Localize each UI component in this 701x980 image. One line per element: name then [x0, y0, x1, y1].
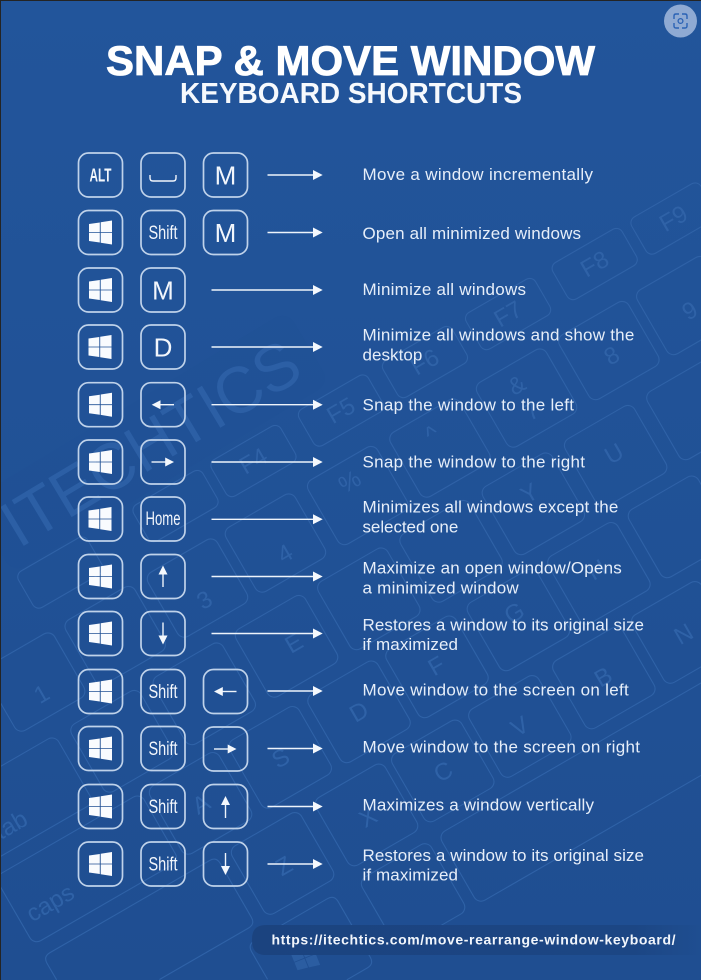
- title: SNAP & MOVE WINDOW: [106, 37, 595, 84]
- watermark: keyboard outline: G: [500, 597, 529, 630]
- row 3: Win M: Minimize all windows: [362, 280, 526, 299]
- row 9: Win Down: [78, 612, 644, 656]
- watermark: keyboard outline: E: [281, 628, 308, 659]
- row 4: Win D: D: [154, 332, 172, 362]
- watermark: keyboard outline: H: [583, 554, 611, 586]
- row 1: Alt Space M: [78, 153, 594, 197]
- row 3: Win M: [78, 268, 526, 312]
- row 1: Alt Space M: M: [215, 160, 236, 190]
- watermark: keyboard outline: Z: [271, 851, 297, 882]
- watermark: keyboard outline: C: [429, 756, 458, 788]
- watermark: keyboard outline: V: [506, 711, 534, 743]
- watermark: keyboard outline: F7: [489, 296, 527, 333]
- row 3: Win M: M: [152, 276, 174, 306]
- row 6: Win Right: [78, 440, 585, 484]
- row 8: Win Up: [78, 554, 622, 598]
- watermark: keyboard outline: Y: [516, 478, 544, 509]
- watermark: keyboard outline: F4: [235, 443, 273, 480]
- watermark: keyboard outline: F5: [322, 392, 360, 430]
- row 5: Win Left: [78, 383, 574, 427]
- watermark: keyboard outline: 3: [192, 586, 217, 616]
- capture button: [664, 4, 697, 38]
- watermark: keyboard outline: 7: [520, 397, 545, 427]
- row 11: Win Shift Right: [78, 726, 640, 771]
- row 12: Win Shift Up: [78, 784, 594, 828]
- watermark: keyboard outline: &: [503, 370, 531, 401]
- watermark: keyboard outline: 8: [600, 341, 625, 371]
- row 7: Win Home: [78, 497, 618, 541]
- watermark: keyboard outline: 4: [273, 539, 298, 569]
- row 10: Win Shift Left: Shift: [148, 682, 178, 703]
- row 13: Win Shift Down: Restores a window to its original size: [362, 846, 644, 865]
- watermark: keyboard outline: D: [345, 696, 374, 728]
- row 12: Win Shift Up: Maximizes a window vertically: [362, 796, 594, 815]
- row 9: Win Down: Restores a window to its original size: [362, 616, 644, 635]
- row 5: Win Left: Snap the window to the left: [362, 396, 574, 415]
- watermark: keyboard outline: U: [600, 438, 629, 470]
- watermark: keyboard outline: F6: [406, 344, 444, 381]
- row 4: Win D: Minimize all windows and show the: [362, 326, 634, 345]
- row 10: Win Shift Left: [78, 670, 629, 714]
- row 13: Win Shift Down: Shift: [148, 854, 178, 876]
- watermark: keyboard outline: caps: [22, 879, 79, 928]
- watermark: keyboard outline: F8: [576, 246, 614, 283]
- row 1: Alt Space M: ALT: [90, 164, 112, 186]
- row 6: Win Right: Snap the window to the right: [362, 452, 585, 471]
- row 7: Win Home: Home: [146, 509, 180, 530]
- row 4: Win D: desktop: [362, 345, 422, 364]
- watermark: keyboard outline: ^: [421, 420, 444, 449]
- row 13: Win Shift Down: [78, 842, 644, 886]
- source URL bar: https://itechtics.com/move-rearrange-window-keyboard/: [272, 932, 676, 948]
- row 4: Win D: [78, 325, 634, 369]
- watermark: keyboard outline: X: [355, 802, 382, 834]
- row 9: Win Down: if maximized: [362, 635, 458, 654]
- watermark: keyboard outline: B: [590, 662, 617, 693]
- watermark: keyboard outline: 1: [29, 680, 54, 710]
- row 2: Win Shift M: [78, 210, 581, 254]
- row 7: Win Home: Minimizes all windows except the: [362, 498, 618, 517]
- row 8: Win Up: Maximize an open window/Opens: [362, 558, 622, 577]
- watermark: keyboard outline: A: [188, 789, 215, 820]
- watermark: windows logo: [290, 943, 320, 973]
- row 11: Win Shift Right: Move window to the screen on right: [362, 738, 640, 757]
- row 2: Win Shift M: Shift: [148, 223, 178, 244]
- watermark: keyboard outline: %: [334, 465, 366, 499]
- watermark: keyboard outline: F9: [655, 200, 693, 238]
- subtitle: KEYBOARD SHORTCUTS: [180, 78, 522, 110]
- row 1: Alt Space M: Move a window incrementally: [362, 165, 594, 184]
- watermark: keyboard outline: N: [670, 619, 698, 651]
- row 11: Win Shift Right: Shift: [148, 739, 178, 760]
- watermark: keyboard outline: F: [424, 651, 450, 682]
- row 8: Win Up: a minimized window: [362, 578, 519, 597]
- row 10: Win Shift Left: Move window to the screen on left: [362, 680, 629, 699]
- row 7: Win Home: selected one: [362, 517, 458, 536]
- watermark: keyboard outline: S: [267, 743, 295, 774]
- row 13: Win Shift Down: if maximized: [362, 866, 458, 885]
- row 12: Win Shift Up: Shift: [148, 797, 178, 818]
- row 2: Win Shift M: Open all minimized windows: [362, 224, 581, 243]
- row 2: Win Shift M: M: [215, 218, 236, 248]
- source URL bar: [252, 925, 701, 955]
